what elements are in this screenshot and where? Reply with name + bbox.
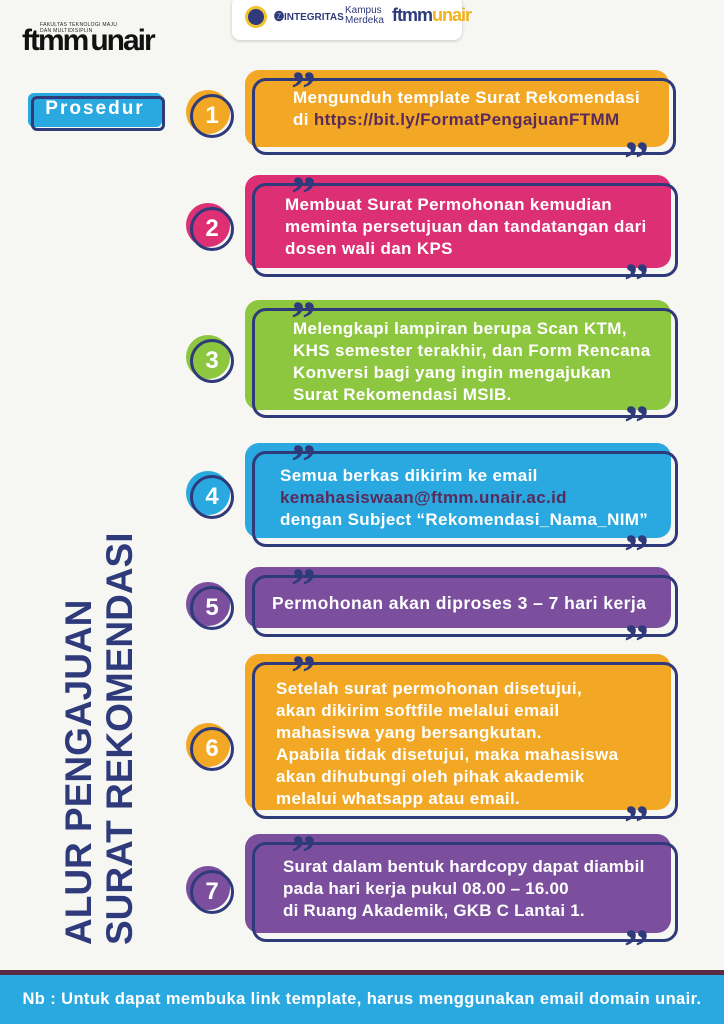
step 3 text: Surat Rekomendasi MSIB.: [293, 385, 512, 404]
step 5 number: 5: [205, 594, 219, 621]
step 1: [186, 68, 676, 164]
header logo strip: Kampus: [345, 5, 382, 16]
step 6 number: [186, 723, 234, 771]
step 6 text: akan dihubungi oleh pihak akademik: [276, 767, 585, 786]
header logo strip: [232, 0, 462, 40]
step 5: [186, 565, 678, 647]
step 2 number: 2: [205, 215, 219, 242]
step 3: [186, 298, 678, 428]
step 6: [186, 652, 678, 828]
step 2 text: Membuat Surat Permohonan kemudian: [285, 195, 612, 214]
vertical title: [58, 532, 140, 945]
step 3 number: [186, 335, 234, 383]
header logo strip: Merdeka: [345, 15, 384, 26]
step 5 text: Permohonan akan diproses 3 – 7 hari kerja: [272, 593, 646, 613]
step 3 text: KHS semester terakhir, dan Form Rencana: [293, 341, 651, 360]
header logo strip: ftmmunair: [392, 5, 471, 25]
step 4: [186, 441, 678, 557]
step 7 text: [283, 857, 644, 920]
step 1 number: [186, 90, 234, 138]
step 2: [186, 173, 678, 286]
logo: ftmm unair: ftmmunair: [22, 24, 154, 57]
prosedur label: [28, 93, 165, 131]
step 7 text: pada hari kerja pukul 08.00 – 16.00: [283, 879, 569, 898]
footer note: Nb : Untuk dapat membuka link template, harus menggunakan email domain unair.: [22, 990, 702, 1008]
prosedur label: Prosedur: [45, 98, 145, 119]
step 7: [186, 832, 678, 952]
step 7 number: [186, 866, 234, 914]
step 3 text: [293, 319, 651, 404]
step 7 number: 7: [205, 878, 219, 905]
step 3 text: Konversi bagi yang ingin mengajukan: [293, 363, 611, 382]
step 6 text: [276, 679, 618, 808]
step 6 text: Apabila tidak disetujui, maka mahasiswa: [276, 745, 618, 764]
step 1 text: di https://bit.ly/FormatPengajuanFTMM: [293, 110, 620, 129]
footer note: [0, 975, 724, 1024]
step 1 number: 1: [205, 102, 219, 129]
step 1 text: [293, 88, 640, 129]
step 7 text: di Ruang Akademik, GKB C Lantai 1.: [283, 901, 585, 920]
step 2 text: meminta persetujuan dan tandatangan dari: [285, 217, 647, 236]
step 2 number: [186, 203, 234, 251]
step 4 number: [186, 471, 234, 519]
vertical title: SURAT REKOMENDASI: [99, 532, 140, 945]
step 2 text: [285, 195, 647, 258]
step 2 text: dosen wali dan KPS: [285, 239, 453, 258]
logo: ftmm unair: FAKULTAS TEKNOLOGI MAJU DAN MULTIDISIPLIN: [40, 22, 117, 34]
step 5 number: [186, 582, 234, 630]
step 7 text: Surat dalam bentuk hardcopy dapat diambil: [283, 857, 644, 876]
step 6 text: akan dikirim softfile melalui email: [276, 701, 559, 720]
step 4 text: kemahasiswaan@ftmm.unair.ac.id: [280, 488, 567, 507]
step 3 number: 3: [205, 347, 219, 374]
header logo strip: 🅩INTEGRITAS: [274, 12, 344, 23]
step 6 text: Setelah surat permohonan disetujui,: [276, 679, 582, 698]
step 4 text: dengan Subject “Rekomendasi_Nama_NIM”: [280, 510, 648, 529]
step 6 text: mahasiswa yang bersangkutan.: [276, 723, 542, 742]
step 4 text: Semua berkas dikirim ke email: [280, 466, 538, 485]
step 4 number: 4: [205, 483, 219, 510]
vertical title: ALUR PENGAJUAN: [58, 600, 99, 945]
step 4 text: [280, 466, 648, 529]
step 6 text: melalui whatsapp atau email.: [276, 789, 520, 808]
step 1 text: Mengunduh template Surat Rekomendasi: [293, 88, 640, 107]
step 3 text: Melengkapi lampiran berupa Scan KTM,: [293, 319, 627, 338]
step 6 number: 6: [205, 735, 219, 762]
